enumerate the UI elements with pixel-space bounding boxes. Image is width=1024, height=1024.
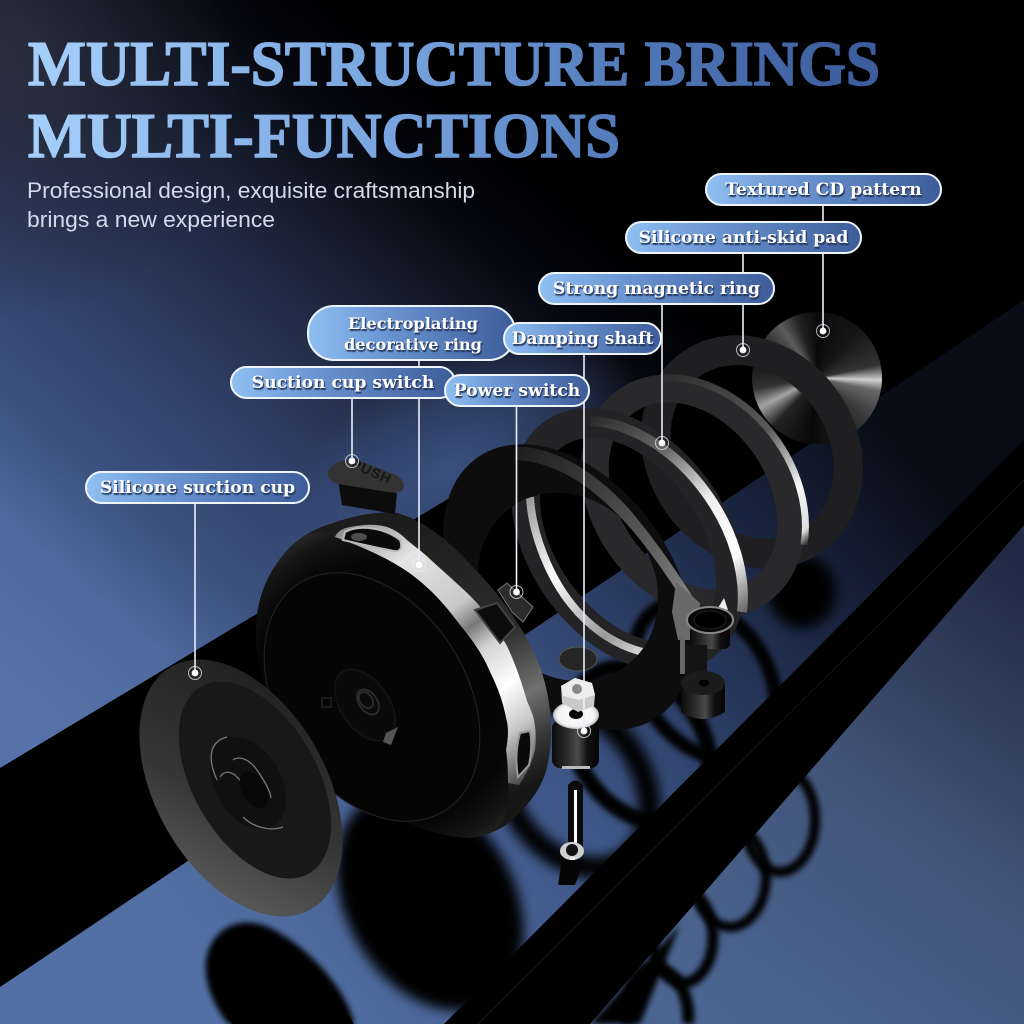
title: MULTI-STRUCTURE BRINGS bbox=[28, 28, 880, 99]
label: silicone anti-skid pad bbox=[625, 221, 862, 254]
background: lower reflective surface bbox=[0, 300, 1024, 1024]
electroplating ring bbox=[335, 525, 536, 785]
power switch bbox=[498, 583, 533, 622]
label: strong magnetic ring: Strong magnetic ring bbox=[553, 279, 760, 299]
part: damping shaft stack bbox=[552, 647, 599, 885]
title: MULTI-FUNCTIONS bbox=[28, 100, 620, 171]
black diagonal stripe bbox=[444, 440, 1024, 1024]
label: power switch: Power switch bbox=[454, 381, 580, 401]
front face bbox=[256, 532, 509, 838]
label: suction cup switch bbox=[230, 366, 456, 399]
part: ring behind magnetic ring bbox=[535, 331, 851, 661]
part: silicone anti-skid pad bbox=[596, 292, 908, 612]
label: silicone suction cup bbox=[85, 471, 310, 504]
part: main body with electroplating ring bbox=[220, 512, 551, 861]
subtitle: Professional design, exquisite craftsmanship bbox=[27, 178, 475, 203]
leader: damping shaft bbox=[578, 353, 590, 738]
subtitle: brings a new experience bbox=[27, 207, 275, 232]
label: electroplating decorative ring bbox=[307, 305, 516, 361]
label: suction cup switch: Suction cup switch bbox=[252, 373, 434, 393]
leader: silicone anti-skid pad bbox=[736, 252, 750, 356]
charging port bbox=[516, 731, 531, 777]
center hub bbox=[322, 658, 408, 752]
part: PUSH suction cup switch: PUSH bbox=[349, 455, 394, 487]
slot bbox=[343, 528, 401, 551]
part: front clamp ring bbox=[391, 397, 745, 777]
label: silicone anti-skid pad: Silicone anti-skid pad bbox=[639, 228, 848, 248]
part: strong magnetic ring bbox=[463, 364, 793, 716]
leader: electroplating decorative ring bbox=[412, 359, 426, 572]
leader: textured CD pattern bbox=[816, 204, 830, 338]
label: power switch bbox=[444, 374, 590, 407]
reflections of the exploded parts bbox=[206, 556, 836, 1024]
clamp ear bbox=[672, 582, 733, 719]
leader: strong magnetic ring bbox=[656, 303, 668, 450]
leader: suction cup switch bbox=[346, 397, 358, 468]
exploded product bbox=[97, 292, 908, 952]
power switch housing bbox=[475, 603, 515, 643]
label: silicone suction cup: Silicone suction cup bbox=[100, 478, 295, 498]
label: damping shaft bbox=[503, 322, 662, 355]
part: silicone suction cup bbox=[97, 624, 385, 952]
label: textured CD pattern: Textured CD pattern bbox=[725, 180, 922, 200]
title bbox=[28, 28, 880, 171]
label: electroplating decorative ring: Electroplating bbox=[348, 314, 478, 333]
leader lines and anchor dots bbox=[188, 204, 830, 738]
part: PUSH suction cup switch bbox=[328, 455, 404, 514]
background: lower-right surface bbox=[590, 525, 1024, 1024]
leader: power switch bbox=[510, 405, 523, 598]
part: textured CD pattern disc bbox=[752, 312, 882, 444]
label: damping shaft: Damping shaft bbox=[512, 329, 653, 349]
leader: silicone suction cup bbox=[188, 502, 202, 680]
label: strong magnetic ring bbox=[538, 272, 775, 305]
subtitle bbox=[27, 178, 475, 232]
label: textured CD pattern bbox=[705, 173, 942, 206]
label: electroplating decorative ring: decorative ring bbox=[344, 335, 482, 354]
